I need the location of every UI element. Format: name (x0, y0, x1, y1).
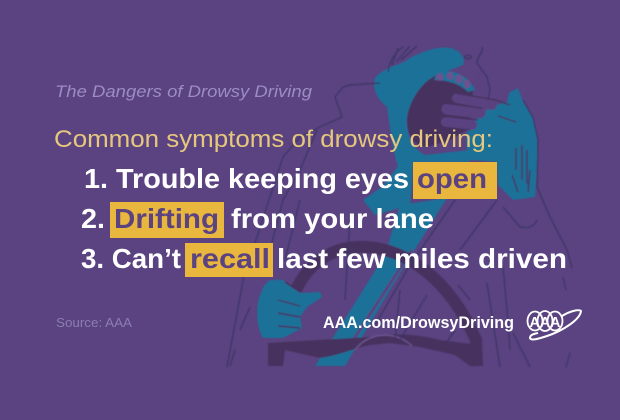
symptom 1 (84, 162, 497, 199)
finger outlines (440, 93, 516, 130)
nose finger (474, 70, 488, 96)
logo letters: AAA (530, 314, 561, 331)
source note: Source: AAA (56, 315, 132, 330)
symptom 2 text: from your lane (231, 203, 434, 234)
fingers (446, 98, 492, 125)
arm crease (350, 250, 412, 345)
steering wheel spokes (268, 334, 483, 366)
grip finger lines (278, 282, 300, 328)
heading: Common symptoms of drowsy driving: (54, 126, 493, 153)
icon: AAA logo (528, 310, 581, 339)
logo swoosh (530, 310, 581, 339)
blue arm (315, 198, 447, 366)
symptom 3 end: last few miles driven (277, 243, 567, 274)
logo ovals (528, 311, 562, 331)
highlight: open (413, 162, 497, 199)
illustration: yawning driver (227, 46, 572, 367)
symptom 2 number: 2. (81, 203, 105, 234)
highlighted word: recall: recall (190, 243, 270, 274)
symptom 1 text: 1. Trouble keeping eyes (84, 163, 409, 194)
highlight: Drifting (110, 202, 224, 238)
symptom 2 (81, 202, 434, 238)
symptom 3 start: 3. Can’t (81, 243, 181, 274)
blue gripping hand (257, 280, 322, 338)
highlighted word: Drifting: Drifting (114, 203, 219, 234)
subtitle: The Dangers of Drowsy Driving (55, 82, 313, 101)
open mouth (407, 74, 473, 146)
website link: AAA.com/DrowsyDriving (323, 313, 514, 332)
highlighted word: open: open (417, 163, 487, 194)
steering wheel hub (355, 335, 412, 350)
teeth (436, 72, 470, 88)
blue upper lip behind teeth (434, 71, 475, 92)
blue covering hand (466, 88, 537, 200)
wrist hatching (512, 145, 530, 192)
blue head (363, 47, 470, 215)
outline strokes (227, 46, 572, 367)
symptom 3 (81, 243, 567, 277)
highlight: recall (185, 243, 273, 277)
steering wheel rim (296, 247, 477, 366)
